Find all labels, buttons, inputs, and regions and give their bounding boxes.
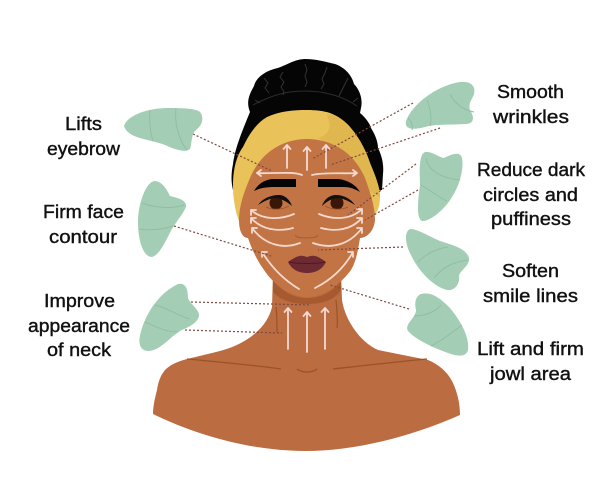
gua sha stone: smooth wrinkles bbox=[406, 82, 474, 130]
massage arrows bbox=[251, 145, 362, 352]
label: improve appearance of neck bbox=[28, 290, 130, 360]
gua sha stone: lift and firm jowl bbox=[407, 293, 468, 356]
label: soften smile lines: smile lines bbox=[483, 285, 578, 306]
label: lift and firm jowl area: jowl area bbox=[489, 363, 572, 384]
gua sha stone: soften smile lines bbox=[406, 229, 469, 290]
lips bbox=[288, 256, 326, 273]
label: soften smile lines: Soften bbox=[502, 260, 559, 281]
hair and bun bbox=[232, 59, 383, 190]
label: firm face contour bbox=[43, 201, 124, 247]
gua sha stone: improve neck bbox=[139, 284, 199, 351]
gua sha stone: reduce dark circles bbox=[418, 152, 463, 221]
label: firm face contour: Firm face bbox=[43, 201, 124, 222]
label: firm face contour: contour bbox=[49, 226, 117, 247]
label: reduce dark circles and puffiness: circles and bbox=[483, 184, 578, 205]
label: smooth wrinkles: Smooth bbox=[497, 81, 564, 102]
label: lifts eyebrow bbox=[47, 113, 121, 159]
label: lift and firm jowl area bbox=[477, 338, 584, 384]
eyes bbox=[258, 195, 355, 210]
label: improve appearance of neck: of neck bbox=[47, 339, 112, 360]
label: reduce dark circles and puffiness: puffiness bbox=[491, 208, 571, 229]
eyebrows bbox=[254, 179, 360, 192]
label: smooth wrinkles: wrinkles bbox=[492, 106, 569, 127]
headband bbox=[233, 110, 380, 223]
body: shoulders and neck bbox=[153, 272, 460, 451]
label: smooth wrinkles bbox=[492, 81, 569, 127]
face bbox=[239, 139, 375, 297]
label: lifts eyebrow: eyebrow bbox=[47, 138, 121, 159]
label: lifts eyebrow: Lifts bbox=[65, 113, 102, 134]
dotted leader lines bbox=[174, 103, 440, 333]
label: soften smile lines bbox=[483, 260, 578, 306]
gua sha stone: lifts eyebrow bbox=[124, 108, 202, 151]
label: improve appearance of neck: Improve bbox=[44, 290, 115, 311]
label: improve appearance of neck: appearance bbox=[28, 315, 130, 336]
label: reduce dark circles and puffiness: Reduce dark bbox=[477, 159, 586, 180]
label: reduce dark circles and puffiness bbox=[477, 159, 586, 229]
gua sha stone: firm face contour bbox=[138, 181, 186, 257]
label: lift and firm jowl area: Lift and firm bbox=[477, 338, 584, 359]
